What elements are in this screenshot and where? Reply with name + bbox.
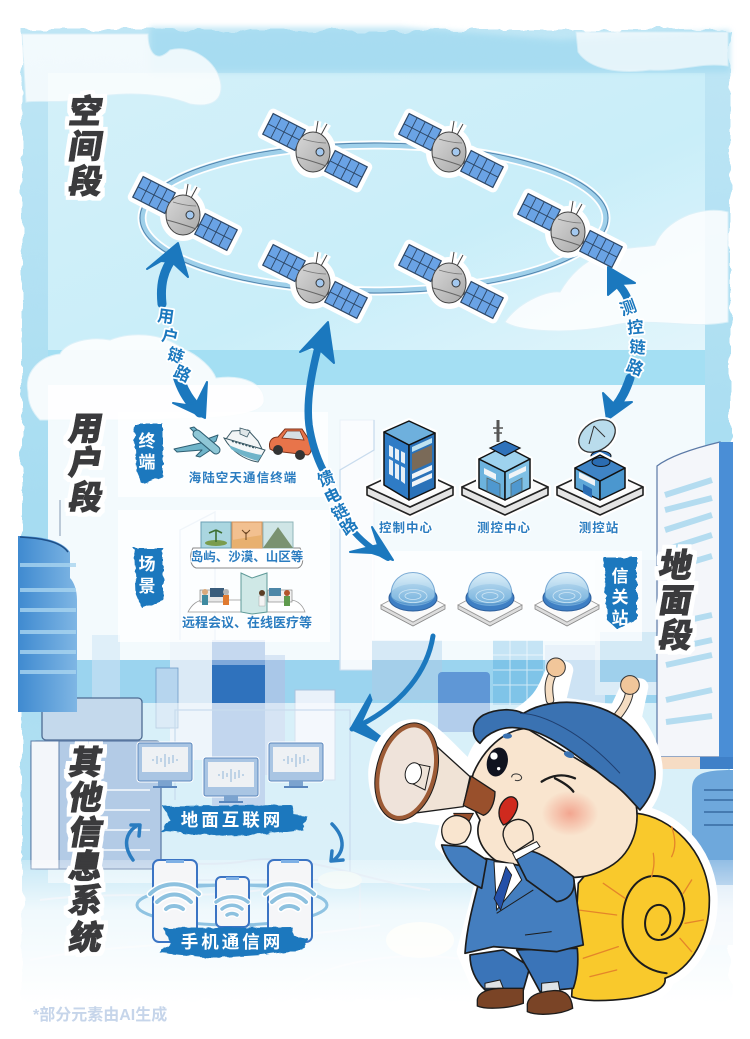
face <box>484 745 598 836</box>
phones and wifi signals <box>137 860 327 942</box>
mascot: snail with megaphone <box>365 658 709 1014</box>
ground and roads <box>30 857 470 990</box>
heading: ground segment: 地 <box>656 548 696 585</box>
trousers <box>470 948 578 992</box>
card: islands deserts mountains: 岛屿、沙漠、山区等 <box>191 549 303 564</box>
heading: other information systems: 息 <box>66 849 106 886</box>
tag: scenarios: 景 <box>138 577 156 596</box>
card: remote meetings and online healthcare: 远程会议、在线医疗等 <box>182 615 312 630</box>
tag: terminals: 终 <box>138 432 156 451</box>
arrow: feeder link: 链 <box>328 499 353 525</box>
arrow: cycle left <box>127 825 140 860</box>
label: control center: 控制中心 <box>379 520 433 535</box>
lower left building <box>31 698 161 869</box>
head <box>471 728 637 877</box>
arrow: user link: 户 <box>160 325 180 348</box>
building: TT&C station <box>557 409 643 515</box>
wifi center <box>216 897 248 915</box>
arrow: gateway to megaphone <box>350 636 433 742</box>
arrow: feeder link: 路 <box>337 514 361 539</box>
body: suit <box>442 842 583 953</box>
arrow: telemetry link: 测 <box>617 296 639 320</box>
heading: space segment: 间 <box>66 129 105 166</box>
wifi left <box>150 884 199 909</box>
arrow: user link <box>147 243 207 418</box>
tag: terminals <box>134 424 163 484</box>
heading: ground segment: 段 <box>656 617 696 655</box>
tag: scenarios <box>134 548 163 608</box>
sticker outline <box>377 667 709 1012</box>
satellite 3 <box>399 114 503 187</box>
banner: terrestrial internet <box>160 805 308 836</box>
tag: terminals: 端 <box>138 453 156 472</box>
orbit ring <box>140 143 608 293</box>
clouds <box>22 32 728 420</box>
icon: airplane <box>174 427 218 457</box>
heading: other information systems: 系 <box>66 883 106 920</box>
tag: gateway station: 站 <box>612 609 628 628</box>
satellite 2 <box>263 114 367 187</box>
tag: gateway station: 关 <box>612 588 628 607</box>
heading: ground segment: 面 <box>656 583 696 620</box>
city midground <box>75 420 665 810</box>
tag: gateway station: 信 <box>612 567 628 586</box>
gateway dome 3 <box>535 572 599 626</box>
icon: car <box>269 429 311 460</box>
banner: terrestrial internet: 地面互联网 <box>181 810 283 830</box>
tag: gateway station <box>604 557 637 629</box>
monitor left <box>138 743 192 788</box>
heading: other information systems: 统 <box>66 919 106 957</box>
shell <box>572 813 709 1001</box>
heading: user segment: 户 <box>66 445 106 482</box>
arrow: telemetry link: 链 <box>628 336 647 358</box>
heading: space segment: 空 <box>66 93 105 131</box>
heading: space segment: 段 <box>66 163 105 201</box>
gateway dome 2 <box>458 572 522 626</box>
arrow: cycle right <box>331 824 343 861</box>
phone center <box>216 877 249 927</box>
building: TT&C center <box>462 420 548 515</box>
hand at mouth <box>503 819 533 853</box>
label: TT&C center: 测控中心 <box>477 520 531 535</box>
heading: user segment: 段 <box>66 479 106 517</box>
label: sea land air space terminals: 海陆空天通信终端 <box>189 470 297 485</box>
monitor center <box>204 758 258 803</box>
footnote: AI-generated elements: *部分元素由AI生成 <box>33 1005 167 1024</box>
left tower <box>18 500 77 712</box>
satellite 1 <box>133 177 237 250</box>
card: remote meetings and online healthcare <box>182 573 312 630</box>
wifi right <box>265 884 314 909</box>
panel: terminals <box>118 412 328 497</box>
heading: other information systems: 其 <box>66 745 106 782</box>
panel: scenarios <box>118 510 330 642</box>
building: control center <box>367 421 453 515</box>
heading: ground segment <box>656 548 696 655</box>
banner: mobile network: 手机通信网 <box>181 932 283 952</box>
arrow: user link: 路 <box>171 362 194 386</box>
heading: user segment <box>66 411 106 517</box>
arrow: feeder link <box>300 322 393 560</box>
monitor right <box>269 743 323 788</box>
heading: other information systems: 信 <box>66 815 106 852</box>
label: TT&C station: 测控站 <box>579 520 619 535</box>
antennae <box>547 658 639 715</box>
satellite 6 <box>399 245 503 318</box>
icon: ship <box>224 428 265 462</box>
heading: user segment: 用 <box>66 411 106 448</box>
panel: ground stations <box>372 551 642 641</box>
pale glaze over city <box>48 385 705 660</box>
arrow: user link: 链 <box>165 343 187 368</box>
megaphone <box>365 716 495 844</box>
satellite 4 <box>518 194 622 267</box>
satellite 5 <box>263 245 367 318</box>
arrow: feeder link: 馈 <box>315 467 337 491</box>
heading: other information systems <box>66 745 106 957</box>
phone left <box>153 860 197 942</box>
heading: space segment <box>66 93 105 201</box>
arrow: telemetry link: 路 <box>624 356 646 380</box>
sketched building outlines <box>165 420 374 930</box>
right tower <box>657 442 733 945</box>
gateway dome 1 <box>381 572 445 626</box>
arrow: user link: 用 <box>156 307 175 327</box>
heading: other information systems: 他 <box>66 780 106 817</box>
card: islands deserts mountains <box>191 522 303 568</box>
tag: scenarios: 场 <box>138 555 156 574</box>
arrow: feeder link: 电 <box>321 484 345 508</box>
arrow: telemetry link <box>603 267 647 420</box>
banner: mobile network <box>160 927 308 958</box>
cap <box>474 702 655 810</box>
arrow: telemetry link: 控 <box>626 317 645 338</box>
shoes <box>477 980 573 1014</box>
phone right <box>268 860 312 942</box>
